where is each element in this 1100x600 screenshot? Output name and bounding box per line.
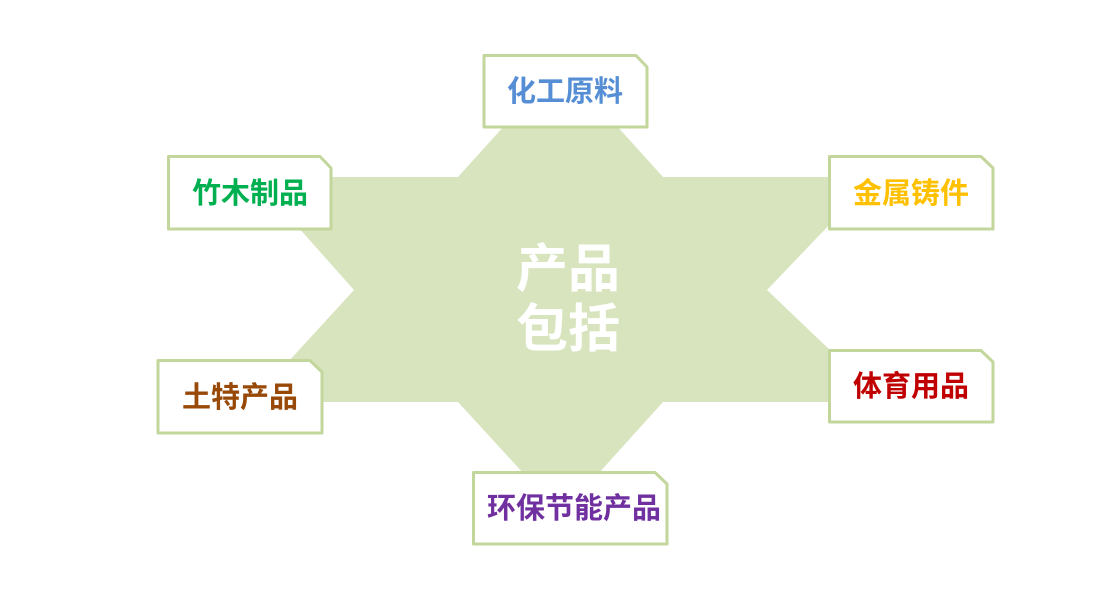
box: metal castings: 金属铸件 <box>853 177 969 210</box>
box: sporting goods <box>830 350 993 422</box>
box: local specialty products: 土特产品 <box>182 381 298 414</box>
center label: 包括 <box>516 301 620 359</box>
box: eco-friendly energy-saving products <box>474 472 667 544</box>
center label <box>516 241 620 359</box>
box: bamboo and wood products <box>168 156 331 229</box>
box: chemical raw materials: 化工原料 <box>507 75 623 108</box>
box: eco-friendly energy-saving products: 环保节能产品 <box>487 492 661 525</box>
box: sporting goods: 体育用品 <box>853 370 969 403</box>
central six-point star shape <box>288 125 832 474</box>
center label: 产品 <box>516 241 620 299</box>
box: chemical raw materials <box>484 56 647 127</box>
box: local specialty products <box>158 360 322 433</box>
box: metal castings <box>830 156 993 229</box>
box: bamboo and wood products: 竹木制品 <box>192 177 308 210</box>
